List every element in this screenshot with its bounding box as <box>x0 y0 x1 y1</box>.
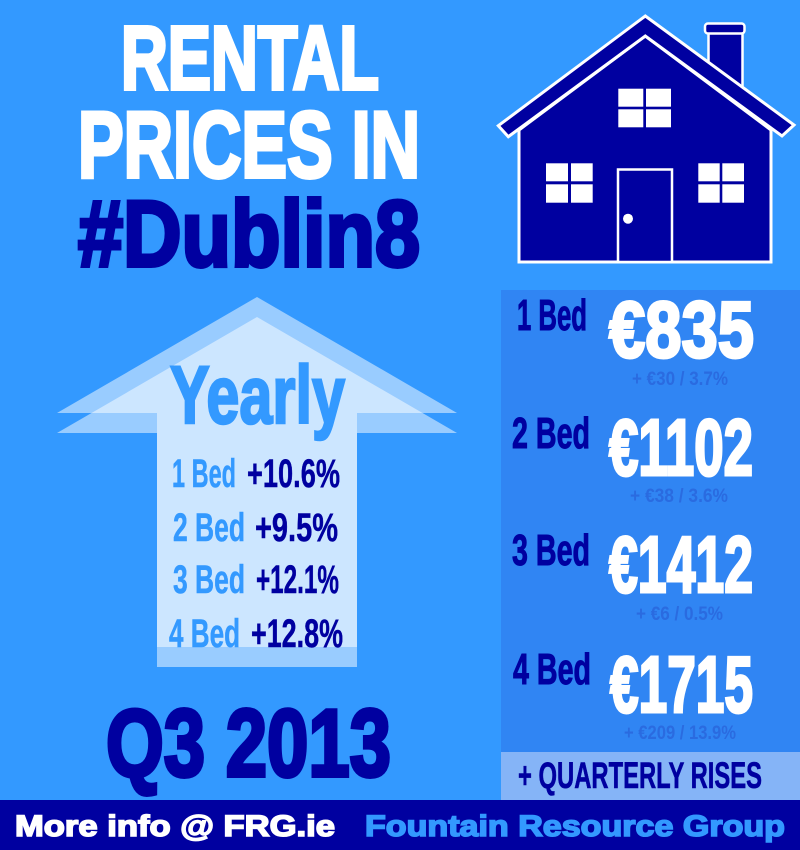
price: 3 bed <box>512 520 753 625</box>
title: PRICES IN <box>78 92 420 197</box>
price: 4 bed <box>513 640 753 744</box>
row: 3 bed yearly: 3 Bed <box>173 558 245 602</box>
date: Q3 2013: Q3 2013 <box>106 690 391 797</box>
title: RENTAL <box>121 9 379 109</box>
house body <box>519 36 771 262</box>
right window <box>698 163 744 203</box>
row: 3 bed yearly: +12.1% <box>256 558 339 602</box>
panel: quarterly prices <box>501 285 800 752</box>
price: 2 bed: 2 Bed <box>512 409 590 458</box>
row: 1 bed yearly: 1 Bed <box>172 452 236 496</box>
heading: yearly: Yearly <box>170 350 345 441</box>
chimney <box>705 24 744 93</box>
door knob <box>623 214 633 224</box>
price: 2 bed <box>512 403 753 507</box>
title <box>78 9 420 286</box>
door <box>618 170 672 262</box>
footer: more info: More info @ FRG.ie <box>15 810 335 843</box>
left window <box>546 163 593 203</box>
row: 1 bed yearly <box>172 452 340 496</box>
row: 3 bed yearly <box>173 558 339 602</box>
row: 4 bed yearly <box>169 612 343 656</box>
price: 1 bed <box>517 285 754 390</box>
row: 2 bed yearly: 2 Bed <box>173 506 245 550</box>
price: 4 bed: + €209 / 13.9% <box>624 723 736 744</box>
price: 1 bed: 1 Bed <box>517 291 587 340</box>
row: 2 bed yearly <box>173 506 338 550</box>
price: 4 bed: 4 Bed <box>513 645 591 694</box>
arrow: yearly rise <box>57 297 457 667</box>
footer: organisation: Fountain Resource Group <box>365 810 785 843</box>
price: 2 bed: + €38 / 3.6% <box>630 486 728 507</box>
top window <box>618 89 671 127</box>
price: 1 bed: €835 <box>609 285 754 374</box>
row: 4 bed yearly: 4 Bed <box>169 612 240 656</box>
roof <box>498 16 794 137</box>
footer <box>0 800 800 850</box>
icon: house <box>498 16 794 262</box>
title: #Dublin8 <box>78 181 420 286</box>
row: 2 bed yearly: +9.5% <box>255 506 338 550</box>
row: 4 bed yearly: +12.8% <box>251 612 343 656</box>
yearly rises list <box>169 452 343 656</box>
price: 3 bed: 3 Bed <box>512 526 590 575</box>
price: 3 bed: + €6 / 0.5% <box>636 604 723 625</box>
price: 1 bed: + €30 / 3.7% <box>632 369 728 390</box>
row: 1 bed yearly: +10.6% <box>247 452 340 496</box>
